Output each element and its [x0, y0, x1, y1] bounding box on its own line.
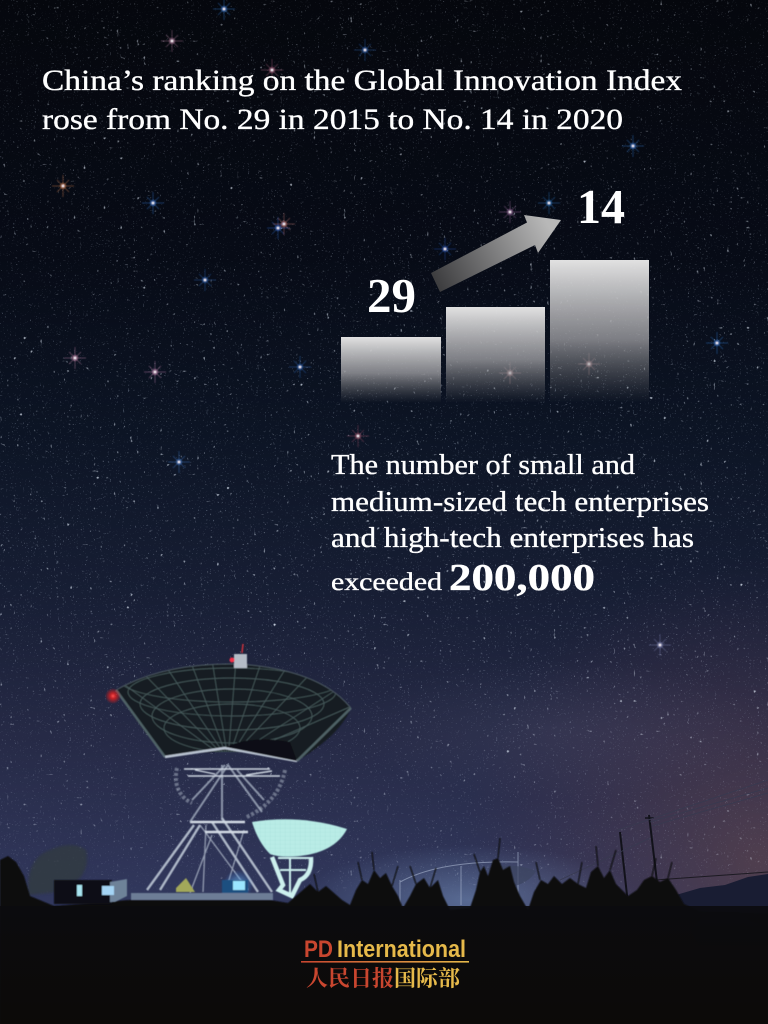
title: [42, 64, 682, 136]
enterprises text block: [331, 450, 709, 599]
red beacon light: [105, 688, 121, 704]
tree line silhouette: [0, 838, 768, 1024]
number: 29: 29: [367, 268, 416, 323]
logo: PD International: 人民日报: [306, 962, 394, 993]
building with lit windows: [54, 879, 127, 904]
bar chart with ranking arrow: [341, 179, 649, 403]
feed cabin: [234, 654, 247, 668]
logo: PD International: [301, 936, 469, 993]
distant mountain: [676, 874, 768, 920]
enterprises text block: and high-tech enterprises has: [331, 523, 694, 554]
bar: middle: [446, 307, 545, 403]
dish bowl: [116, 664, 351, 761]
tower legs: [147, 765, 285, 893]
power lines and poles: [400, 780, 768, 940]
bright coloured stars: [52, 0, 728, 656]
arrow: rising rank: [431, 215, 561, 292]
title: rose from No. 29 in 2015 to No. 14 in 2020: [42, 103, 623, 136]
far dish silhouette: [488, 866, 536, 888]
number: 14: 14: [577, 179, 625, 234]
enterprises text block: The number of small and: [331, 450, 635, 481]
logo: PD International: International: [337, 936, 466, 963]
parked car: [691, 912, 768, 945]
logo: PD International: PD: [304, 936, 333, 963]
enterprises text block: medium-sized tech enterprises: [331, 487, 709, 518]
bar: low: [341, 337, 441, 403]
blue floodlight and deck: [131, 870, 273, 900]
pale tree on left: [28, 845, 87, 895]
bar: high: [550, 260, 649, 403]
radio telescope: large dish: [116, 644, 352, 893]
enterprises text block: 200,000: [449, 557, 595, 599]
small white dish: [252, 819, 347, 896]
enterprises text block: exceeded: [331, 569, 443, 596]
ground: [0, 906, 768, 1024]
title: China’s ranking on the Global Innovation Index: [42, 64, 682, 97]
logo: PD International: 国际部: [394, 962, 460, 993]
